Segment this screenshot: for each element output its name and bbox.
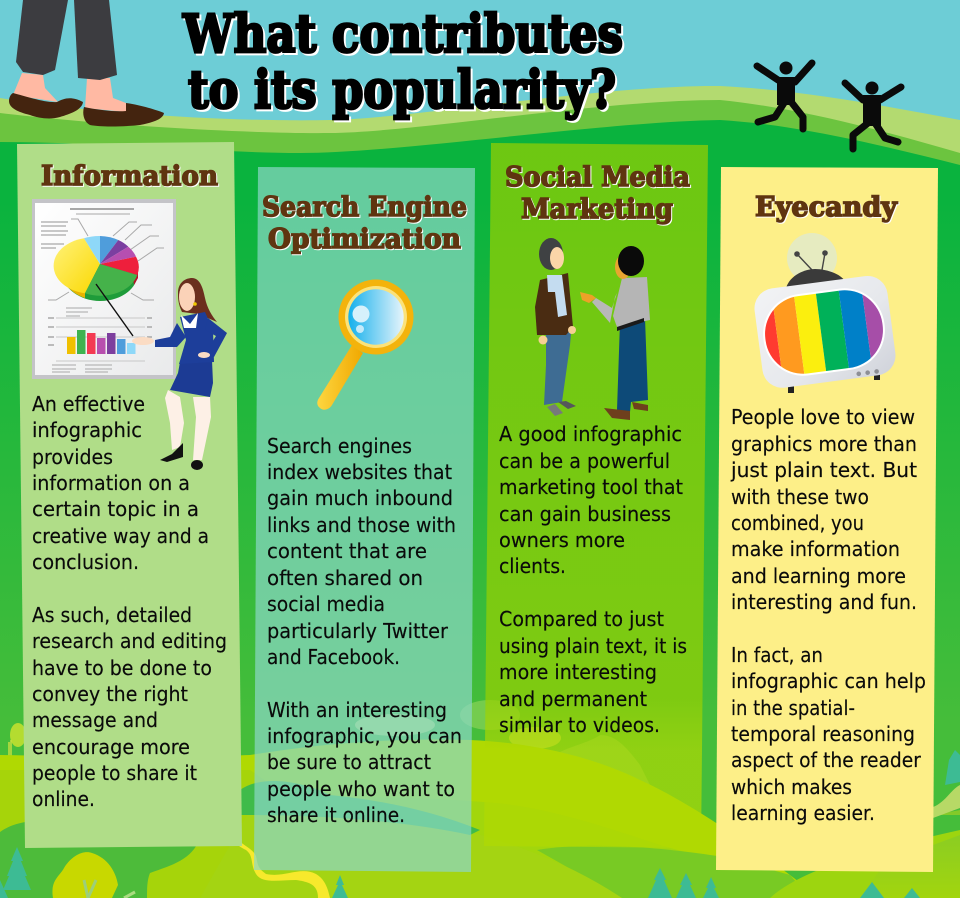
text: seo body: index websites that: [267, 460, 452, 484]
text: social media body: and permanent: [499, 687, 647, 711]
panel: social media marketing: [484, 143, 708, 848]
text: seo body: gain much inbound: [267, 486, 453, 510]
text: eyecandy body: temporal reasoning: [731, 722, 915, 746]
text: information body: have to be done to: [32, 656, 212, 680]
text: seo body: be sure to attract: [267, 750, 431, 774]
text: social media body: clients.: [499, 554, 566, 578]
text: eyecandy body: graphics more than: [731, 432, 917, 456]
text: information body: creative way and a: [32, 524, 209, 548]
text: eyecandy body: make information: [731, 537, 900, 561]
heading: search engine optimization: Optimization: [268, 224, 461, 255]
text: social media body: using plain text, it is: [499, 634, 687, 658]
text: seo body: [267, 434, 462, 827]
icon: two people talking: [535, 238, 650, 420]
text: seo body: Search engines: [267, 434, 412, 458]
text: eyecandy body: with these two: [731, 485, 869, 509]
heading: social media marketing: Social Media: [505, 162, 690, 193]
text: social media body: marketing tool that: [499, 475, 683, 499]
text: information body: research and editing: [32, 629, 227, 653]
text: eyecandy body: infographic can help: [731, 669, 926, 693]
panel: eyecandy: [716, 167, 938, 872]
text: eyecandy body: interesting and fun.: [731, 590, 917, 614]
icon: jumping figures: [757, 62, 901, 149]
text: seo body: infographic, you can: [267, 724, 462, 748]
woman presenter: [96, 278, 227, 470]
text: seo body: people who want to: [267, 777, 455, 801]
text: eyecandy body: aspect of the reader: [731, 748, 922, 772]
text: information body: convey the right: [32, 682, 188, 706]
text: information body: An effective: [32, 392, 145, 416]
text: information body: information on a: [32, 471, 190, 495]
text: eyecandy body: In fact, an: [731, 643, 823, 667]
text: eyecandy body: [730, 405, 926, 825]
text: social media body: owners more: [499, 528, 625, 552]
heading: search engine optimization: Search Engine: [262, 192, 467, 223]
text: information body: [32, 392, 227, 811]
icon: television: [752, 233, 898, 393]
text: eyecandy body: combined, you: [731, 511, 864, 535]
text: information body: As such, detailed: [32, 603, 192, 627]
text: seo body: links and those with: [267, 513, 456, 537]
title: What contributes: [182, 4, 623, 65]
text: seo body: share it online.: [267, 803, 405, 827]
text: social media body: more interesting: [499, 660, 657, 684]
text: seo body: particularly Twitter: [267, 619, 449, 643]
panel: information: [17, 142, 242, 848]
text: seo body: often shared on: [267, 566, 423, 590]
text: information body: provides: [32, 445, 113, 469]
title: to its popularity?: [188, 60, 616, 121]
text: social media body: A good infographic: [499, 422, 682, 446]
text: seo body: With an interesting: [267, 698, 447, 722]
text: social media body: can be a powerful: [499, 449, 670, 473]
text: information body: people to share it: [32, 761, 197, 785]
heading: search engine optimization: [262, 192, 467, 255]
text: eyecandy body: in the spatial-: [731, 696, 855, 720]
text: information body: message and: [32, 708, 158, 732]
text: information body: infographic: [32, 418, 142, 442]
text: eyecandy body: just plain text. But: [730, 458, 917, 482]
heading: information: Information: [41, 161, 218, 192]
text: eyecandy body: People love to view: [731, 405, 915, 429]
text: eyecandy body: learning easier.: [731, 801, 875, 825]
title: [182, 4, 623, 121]
text: social media body: similar to videos.: [499, 713, 660, 737]
text: information body: certain topic in a: [32, 497, 199, 521]
text: information body: online.: [32, 787, 95, 811]
panel: search engine optimization: [254, 167, 475, 872]
text: seo body: and Facebook.: [267, 645, 400, 669]
icon: magnifying glass: [317, 280, 414, 410]
text: social media body: [499, 422, 687, 737]
heading: eyecandy: Eyecandy: [755, 192, 898, 223]
chart board: [32, 199, 176, 379]
text: social media body: can gain business: [499, 502, 671, 526]
text: social media body: Compared to just: [499, 607, 664, 631]
bar chart: [67, 330, 136, 354]
text: seo body: content that are: [267, 539, 427, 563]
text: eyecandy body: which makes: [731, 775, 852, 799]
heading: social media marketing: Marketing: [521, 194, 673, 225]
text: seo body: social media: [267, 592, 385, 616]
pie chart: [54, 236, 139, 301]
heading: social media marketing: [505, 162, 690, 225]
text: information body: conclusion.: [32, 550, 139, 574]
text: information body: encourage more: [32, 735, 190, 759]
icon: walking legs: [9, 0, 164, 126]
text: eyecandy body: and learning more: [731, 564, 906, 588]
